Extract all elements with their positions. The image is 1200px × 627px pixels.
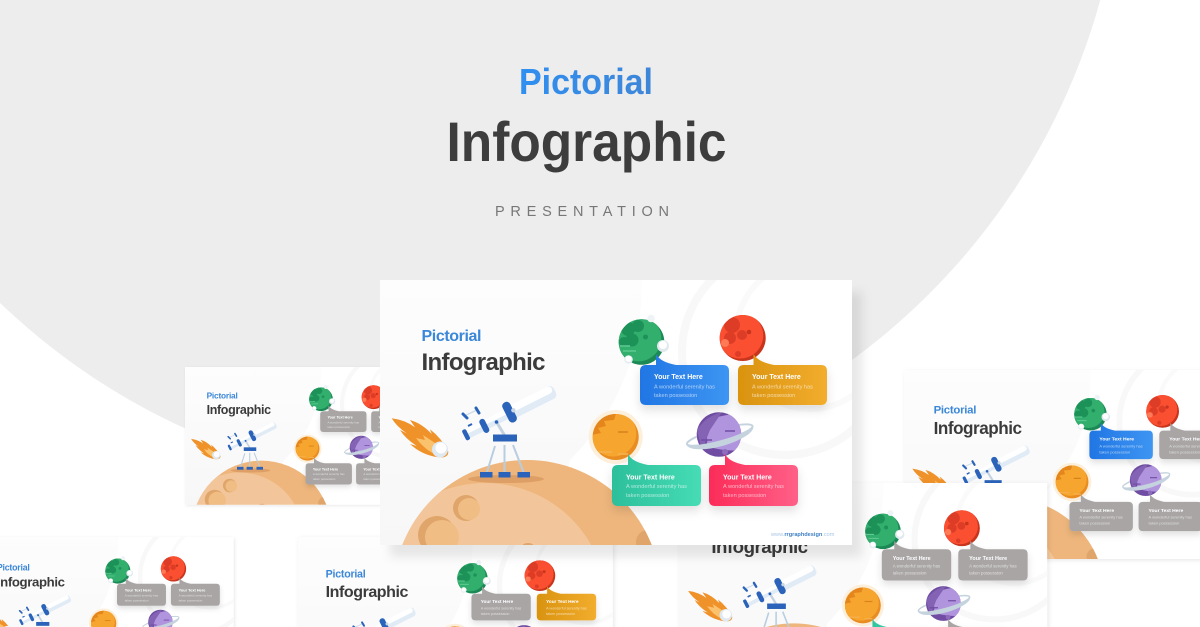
callout: teal: taken possession xyxy=(626,493,669,499)
slide: lower centre preview: Your Text Here xyxy=(481,599,514,604)
background grey circle xyxy=(0,0,1124,488)
slide: lower left preview: taken possession xyxy=(125,598,149,602)
slide: lower centre preview: A wonderful serenity has xyxy=(481,606,521,610)
slide: lower left preview: Your Text Here xyxy=(125,588,151,592)
slide: upper left preview: Your Text Here xyxy=(363,468,389,472)
slide: lower right preview: taken possession xyxy=(969,570,1003,575)
slide: right preview: A wonderful serenity has xyxy=(1149,514,1192,519)
slide: upper left preview: A wonderful serenity has xyxy=(363,472,396,476)
slide: lower left preview: A wonderful serenity has xyxy=(125,594,159,598)
illustration: comet, telescope and moon xyxy=(392,386,652,545)
slide: lower right preview: Pictorial xyxy=(711,520,758,534)
slide: upper left preview: Your Text Here xyxy=(378,415,404,419)
callout: amber: taken possession xyxy=(752,393,795,399)
title: Infographic: Infographic xyxy=(446,110,726,173)
callout: teal: Your Text Here xyxy=(626,474,675,482)
slide: lower centre preview: taken possession xyxy=(546,612,575,616)
callout: blue: Your Text Here xyxy=(654,374,703,381)
callout: teal: A wonderful serenity has xyxy=(626,484,687,490)
slide: lower centre preview: Your Text Here xyxy=(546,599,579,604)
website credit: www.rrgraphdesign.com xyxy=(770,532,835,538)
callout: blue xyxy=(640,354,729,405)
slide: right preview: Infographic xyxy=(934,419,1022,438)
slide: lower centre preview: Pictorial xyxy=(326,569,366,581)
slide: right preview: Pictorial xyxy=(934,404,976,416)
callout: pink: taken possession xyxy=(723,493,766,499)
slide: right preview: A wonderful serenity has xyxy=(1099,443,1143,448)
slide: upper left preview: Pictorial xyxy=(207,391,238,401)
title: Pictorial: Pictorial xyxy=(519,61,653,102)
slide: lower centre preview xyxy=(326,545,615,627)
callout: pink xyxy=(709,454,798,506)
slide: right preview: A wonderful serenity has xyxy=(1079,514,1123,519)
slide: lower centre preview: taken possession xyxy=(481,612,510,616)
slide: upper left preview: A wonderful serenity has xyxy=(327,420,360,424)
icon: orange planet xyxy=(589,410,643,464)
slide: right preview: Your Text Here xyxy=(1079,508,1114,514)
slide: upper left preview: Your Text Here xyxy=(327,415,353,419)
slide: right preview: taken possession xyxy=(1149,521,1179,526)
slide: lower right preview: Infographic xyxy=(711,536,808,557)
slide: upper left preview: taken possession xyxy=(363,477,386,481)
slide: lower right preview: A wonderful serenity has xyxy=(893,564,941,569)
icon: red planet xyxy=(717,312,766,361)
callout: amber xyxy=(738,354,827,405)
slide: upper left preview: A wonderful serenity has xyxy=(378,420,411,424)
slide: right preview xyxy=(912,395,1200,561)
icon: purple ringed planet xyxy=(685,412,755,457)
slide: lower left preview: taken possession xyxy=(179,598,203,602)
callout: blue: taken possession xyxy=(654,393,697,399)
slide: lower left preview: A wonderful serenity has xyxy=(179,594,213,598)
slide: right preview: taken possession xyxy=(1169,449,1200,454)
slide: upper left preview xyxy=(185,367,380,506)
slide: right preview: taken possession xyxy=(1079,521,1110,526)
slide heading: Infographic: Infographic xyxy=(422,349,546,376)
slide: lower right preview xyxy=(688,483,1050,627)
slide: right preview: Your Text Here xyxy=(1099,437,1134,443)
slide: upper left preview: Your Text Here xyxy=(313,468,338,472)
callout: pink: A wonderful serenity has xyxy=(723,484,784,490)
slide: lower right preview: taken possession xyxy=(893,570,927,575)
slide: lower right preview: A wonderful serenity has xyxy=(969,564,1017,569)
slide: lower centre preview: Infographic xyxy=(326,584,408,601)
callout: teal xyxy=(612,454,701,506)
slide: upper left preview: taken possession xyxy=(327,425,350,429)
icon: green planet xyxy=(616,315,669,365)
slide: lower right preview: Your Text Here xyxy=(969,556,1007,562)
subtitle: Presentation: PRESENTATION xyxy=(495,204,669,220)
slide: upper left preview: taken possession xyxy=(378,425,401,429)
callout: amber: A wonderful serenity has xyxy=(752,384,813,390)
slide: lower left preview xyxy=(0,538,236,627)
slide: upper left preview: A wonderful serenity has xyxy=(313,472,345,476)
slide heading: Pictorial: Pictorial xyxy=(422,328,482,345)
slide: upper left preview: Infographic xyxy=(207,403,271,417)
callout: pink: Your Text Here xyxy=(723,474,772,482)
slide: lower right preview: Your Text Here xyxy=(893,556,931,562)
slide: right preview: taken possession xyxy=(1099,449,1130,454)
slide: lower left preview: Your Text Here xyxy=(179,588,205,592)
slide: right preview: Your Text Here xyxy=(1149,508,1184,514)
callout: blue: A wonderful serenity has xyxy=(654,384,715,390)
slide: upper left preview: taken possession xyxy=(313,477,336,481)
slide: lower centre preview: A wonderful serenity has xyxy=(546,606,587,610)
callout: amber: Your Text Here xyxy=(752,374,801,381)
slide: main centre preview xyxy=(380,280,864,558)
